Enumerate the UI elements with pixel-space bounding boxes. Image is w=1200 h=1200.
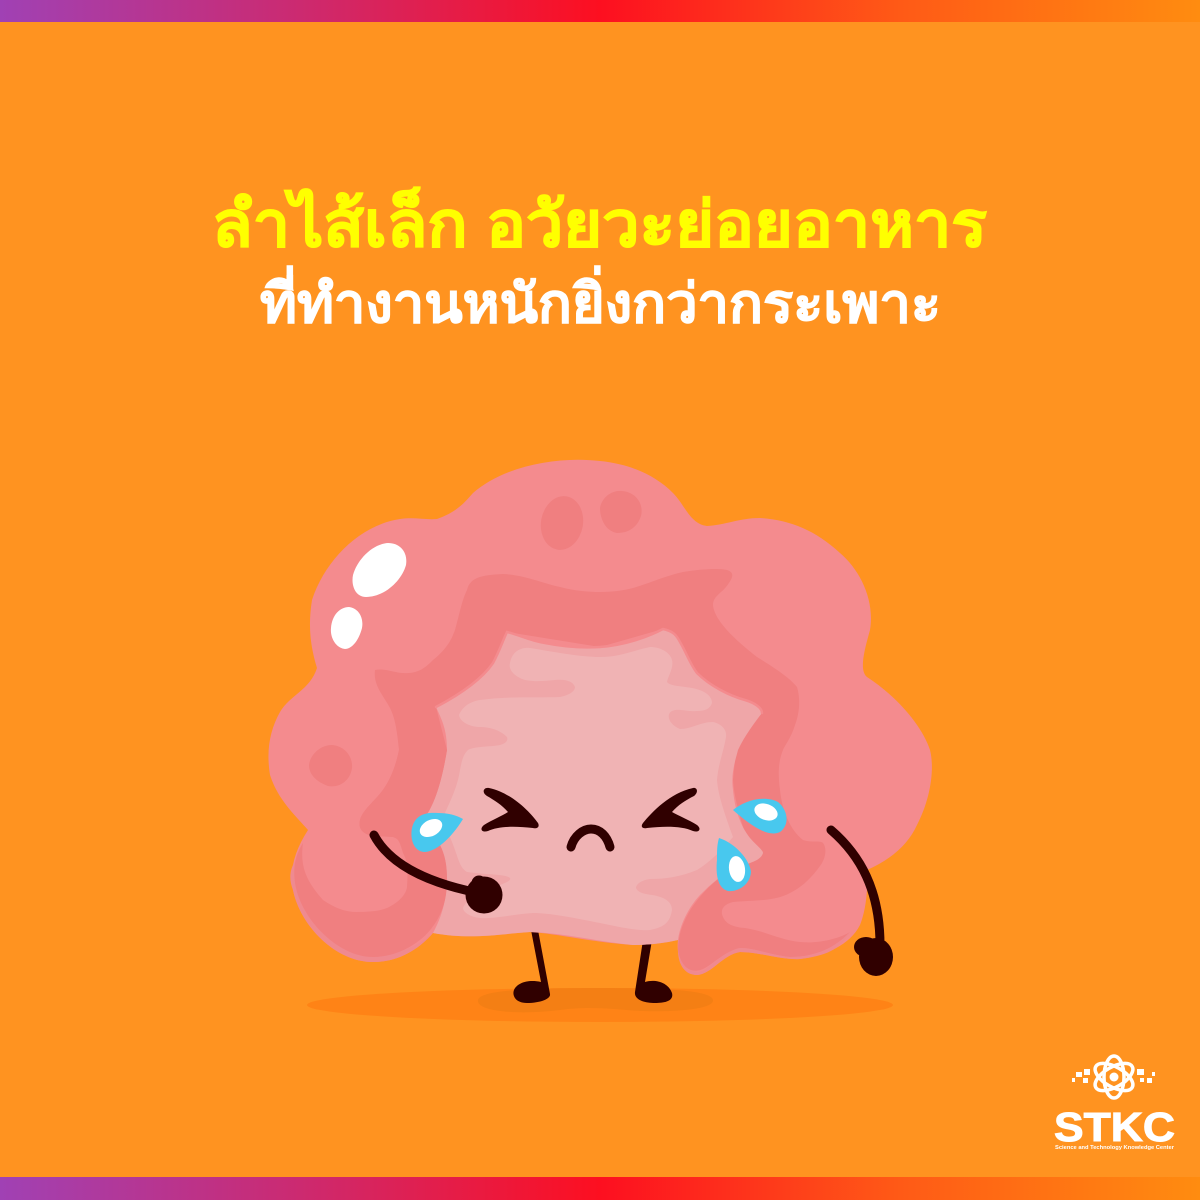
logo tagline: Science and Technology Knowledge Center [1055,1145,1175,1151]
intestine character [268,460,932,1003]
outer intestine body [268,460,932,975]
inner body rim [436,629,762,713]
tear: right upper [733,799,787,833]
face [481,788,700,847]
arm: left [374,835,490,895]
highlight: large [353,543,406,597]
eye: left [481,788,539,832]
spot: top left [537,493,587,553]
logo wordmark: STKC [1054,1104,1175,1150]
logo: STKC [1054,1056,1175,1151]
inner body highlight [442,647,733,930]
ground shadow [307,988,893,1022]
right foot lobe edge [678,932,850,975]
logo pixel squares [1072,1069,1155,1083]
middle band [360,569,850,971]
tear: left [411,813,463,852]
top gradient bar [0,0,1200,22]
bottom gradient bar [0,1177,1200,1200]
spot: top right [600,491,642,533]
title [212,186,987,334]
tear: right lower [717,838,751,891]
inner body [423,629,763,945]
eye: right [642,788,700,832]
title line 2: ที่ทำงานหนักยิ่งกว่ากระเพาะ [260,265,941,334]
lower left lobe [290,750,447,962]
title line 1: ลำไส้เล็ก อวัยวะย่อยอาหาร [212,186,987,260]
highlight: small [331,607,362,649]
leg and foot: right [635,940,672,1003]
leg and foot: left [513,930,550,1003]
logo atom icon [1091,1056,1137,1098]
hand: right [854,937,893,976]
spot: left lobe [309,745,352,786]
arm: right [831,830,880,945]
mouth [571,829,610,847]
hand: left [466,876,502,914]
